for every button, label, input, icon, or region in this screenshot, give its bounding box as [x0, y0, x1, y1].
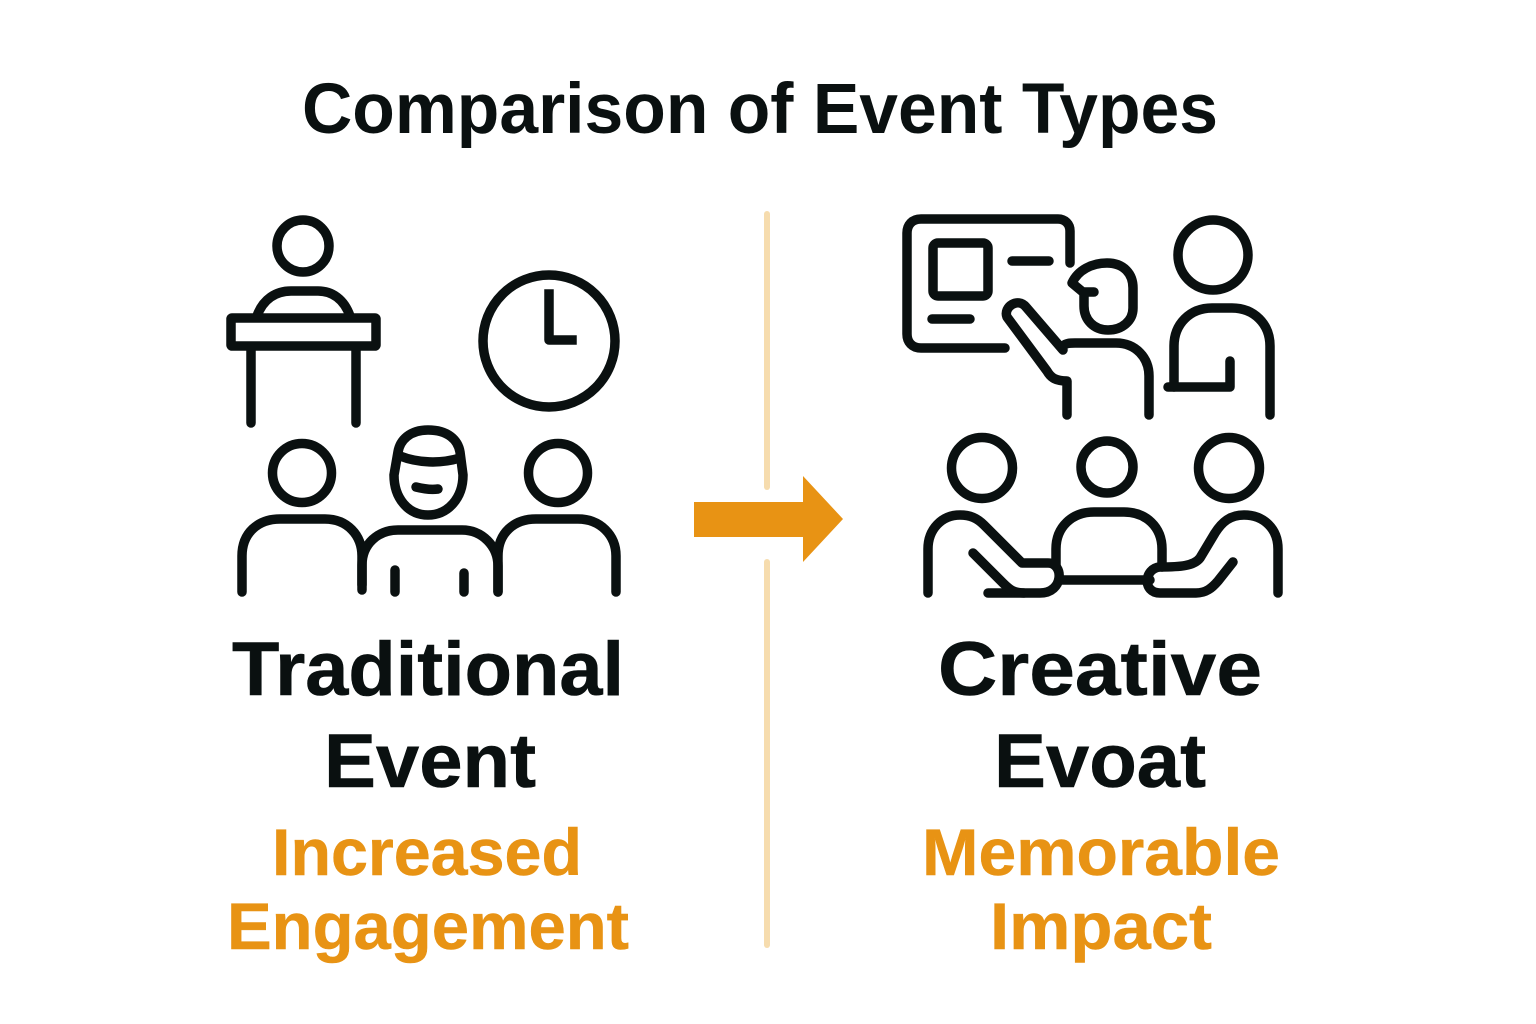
heading: creative evoat: Evoat [994, 719, 1206, 804]
center divider [764, 214, 770, 945]
panel: creative event [907, 219, 1280, 963]
icon: audience [242, 430, 616, 592]
icon: clock [483, 275, 615, 407]
label: increased engagement: Increased [272, 815, 582, 889]
label: memorable impact [922, 815, 1280, 963]
label: memorable impact: Impact [990, 889, 1212, 963]
heading: creative evoat: Creative [938, 627, 1262, 712]
title: Comparison of Event Types [302, 70, 1218, 149]
icon: team at table [928, 438, 1278, 593]
label: increased engagement: Engagement [227, 889, 629, 963]
arrow [694, 476, 843, 562]
heading: creative evoat [938, 627, 1262, 804]
panel: traditional event [227, 220, 629, 963]
icon: presenter at board [907, 219, 1149, 415]
icon: second presenter [1168, 220, 1270, 415]
icon: speaker at podium [231, 220, 376, 423]
heading: traditional event [232, 627, 624, 804]
label: memorable impact: Memorable [922, 815, 1280, 889]
label: increased engagement [227, 815, 629, 963]
heading: traditional event: Traditional [232, 627, 624, 712]
heading: traditional event: Event [324, 719, 536, 804]
